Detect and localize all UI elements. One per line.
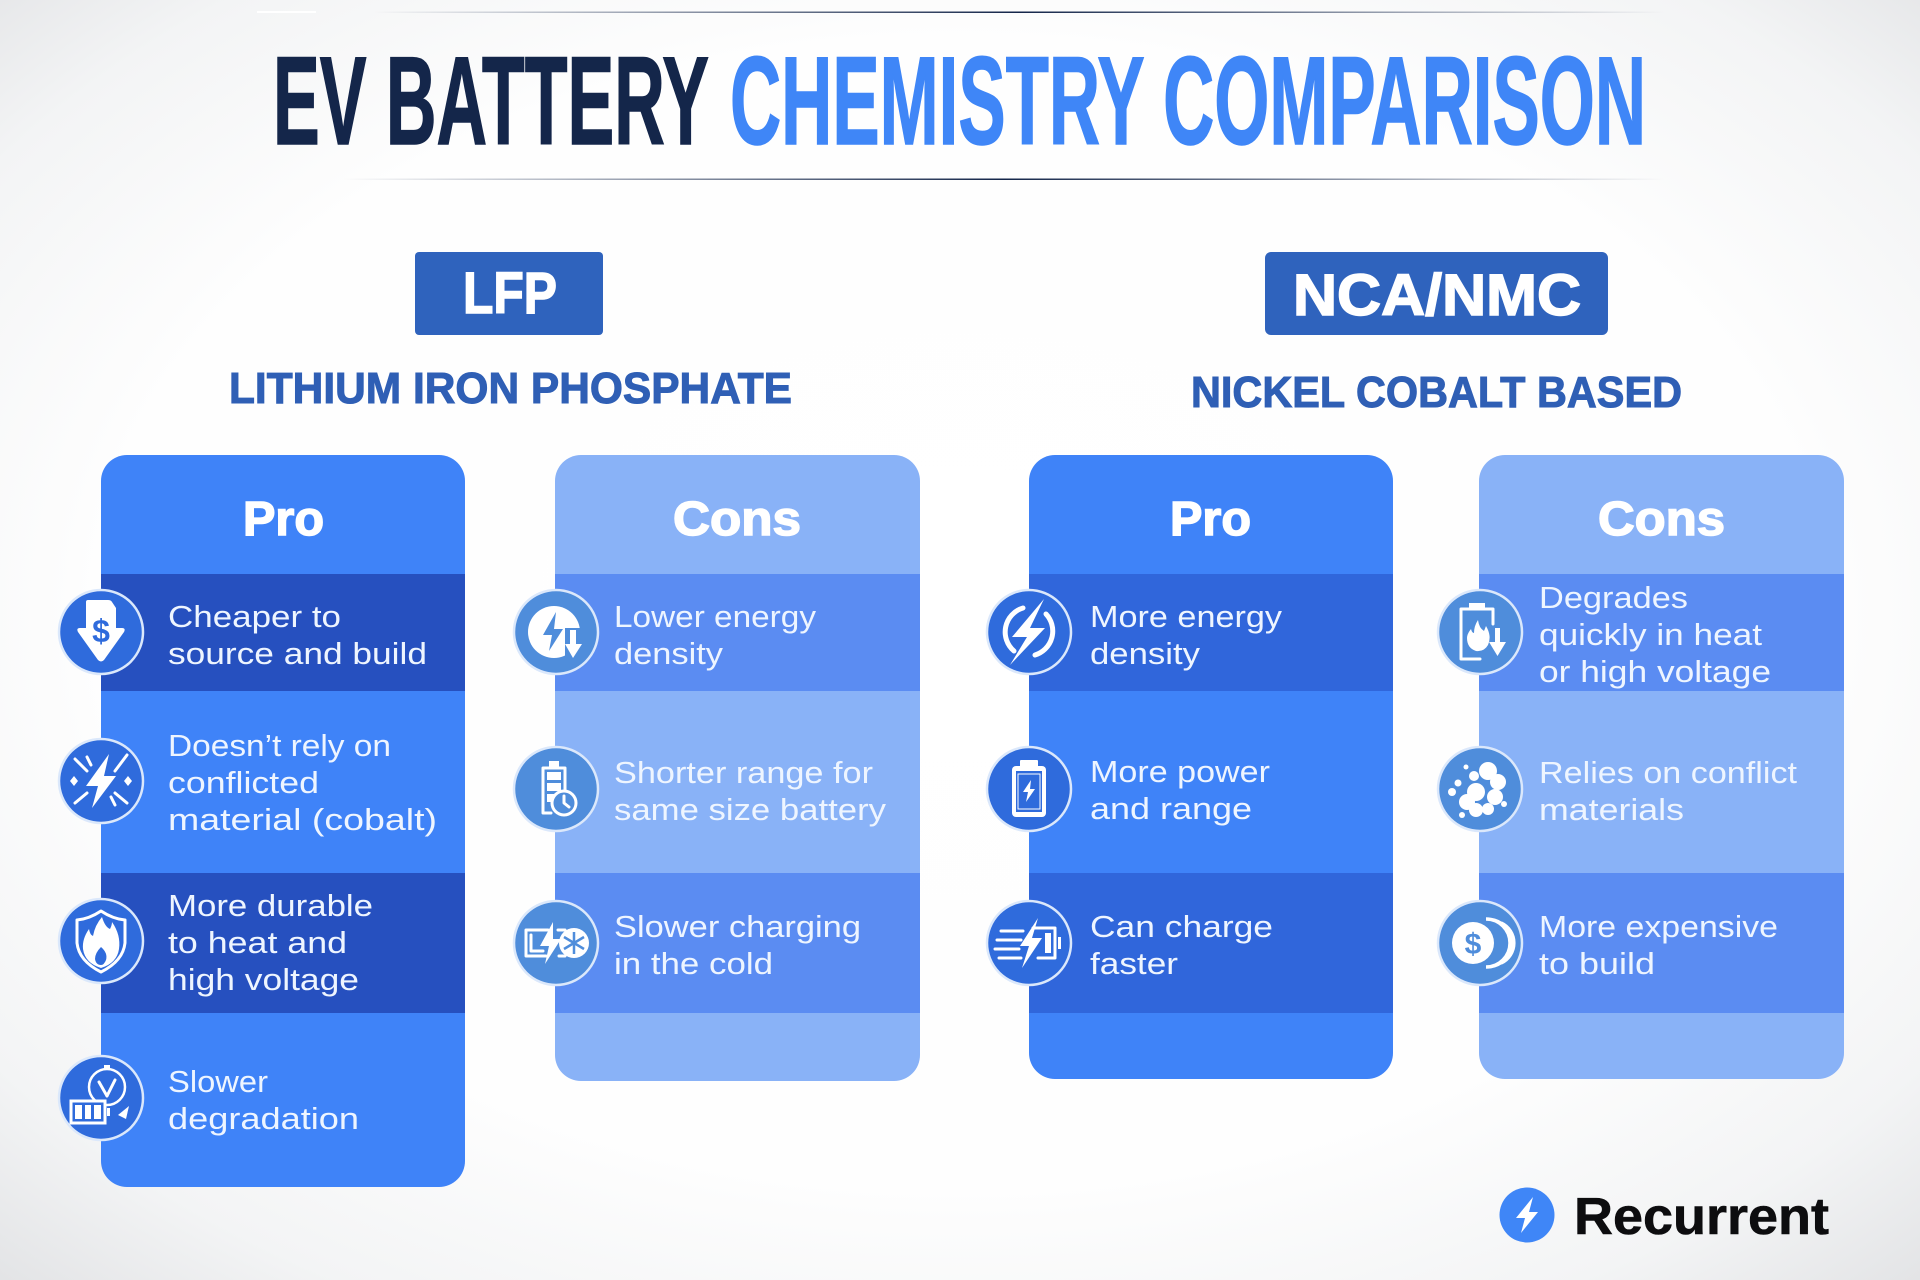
text: no cobalt: conflicted — [168, 765, 319, 800]
row: durable — [59, 888, 373, 997]
NCA/NMC badge: NCA/NMC — [1293, 263, 1581, 328]
text: shorter range: same size battery — [614, 792, 887, 827]
text: degrades — [1539, 580, 1771, 689]
text: slower degradation: Slower — [168, 1064, 268, 1099]
text: cheaper: source and build — [168, 636, 427, 671]
panel: NCA/NMC cons — [1438, 455, 1844, 1079]
icon: charged battery — [987, 747, 1071, 831]
text: more expensive: to build — [1539, 946, 1655, 981]
text: lower energy — [614, 599, 817, 671]
NCA pros heading: Pro — [1170, 493, 1251, 546]
icon: fast charging battery — [987, 901, 1071, 985]
text: degrades: or high voltage — [1539, 654, 1771, 689]
panel: LFP pros — [59, 455, 465, 1187]
text: charge faster: Can charge — [1090, 909, 1273, 944]
NCA/NMC badge — [1265, 252, 1608, 335]
NCA cons band 1 — [1479, 574, 1844, 691]
icon: coins: $ — [1465, 928, 1482, 961]
LFP pros band 2 — [101, 873, 465, 1013]
NCA cons band 2 — [1479, 873, 1844, 1013]
LFP badge: LFP — [463, 261, 557, 326]
text: more energy — [1090, 599, 1283, 671]
row: charge faster — [987, 901, 1273, 985]
NCA pros band 1 — [1029, 574, 1393, 691]
text: durable: high voltage — [168, 962, 359, 997]
text: conflict materials — [1539, 755, 1797, 827]
text: more expensive — [1539, 909, 1778, 981]
text: slower degradation — [168, 1064, 359, 1136]
text: more expensive: More expensive — [1539, 909, 1778, 944]
text: slower degradation: degradation — [168, 1101, 359, 1136]
icon: coins — [1438, 901, 1522, 985]
panel: NCA/NMC pros — [987, 455, 1393, 1079]
title: EV BATTERY — [273, 32, 709, 171]
text: more energy: More energy — [1090, 599, 1283, 634]
text: durable: More durable — [168, 888, 373, 923]
NCA cons card background — [1479, 455, 1844, 1079]
NCA/NMC subtitle: NICKEL COBALT BASED — [1191, 368, 1682, 417]
LFP cons card background — [555, 455, 920, 1081]
text: no cobalt: Doesn’t rely on — [168, 728, 391, 763]
icon: battery with flame — [1438, 590, 1522, 674]
NCA pros card background — [1029, 455, 1393, 1079]
icon: bolt with down arrow — [514, 590, 598, 674]
text: cold charging — [614, 909, 861, 981]
row: no cobalt — [59, 728, 437, 837]
row: more energy — [987, 590, 1283, 674]
LFP cons band 1 — [555, 574, 920, 691]
logo: Recurrent — [1500, 1188, 1829, 1246]
LFP cons band 2 — [555, 873, 920, 1013]
row: cheaper — [59, 590, 427, 674]
icon: battery bolt and snowflake — [514, 901, 598, 985]
row: degrades — [1438, 580, 1771, 689]
text: degrades: Degrades — [1539, 580, 1688, 615]
text: degrades: quickly in heat — [1539, 617, 1762, 652]
icon: battery and clock — [514, 747, 598, 831]
row: more expensive — [1438, 901, 1778, 985]
icon: shield with flame — [59, 899, 143, 983]
row: conflict materials — [1438, 747, 1797, 831]
panel: LFP cons — [514, 455, 920, 1081]
LFP pros heading: Pro — [243, 493, 324, 546]
text: durable — [168, 888, 373, 997]
text: no cobalt — [168, 728, 437, 837]
text: cheaper — [168, 599, 427, 671]
text: more energy: density — [1090, 636, 1201, 671]
LFP badge — [415, 252, 603, 335]
LFP cons heading: Cons — [673, 493, 801, 546]
row: slower degradation — [59, 1056, 359, 1140]
icon: molecule cluster — [1438, 747, 1522, 831]
text: durable: to heat and — [168, 925, 347, 960]
wordmark: Recurrent — [1574, 1188, 1829, 1246]
text: more power — [1090, 754, 1270, 826]
icon: bolt with sparks — [59, 739, 143, 823]
text: shorter range: Shorter range for — [614, 755, 873, 790]
text: lower energy: density — [614, 636, 724, 671]
icon: power bolt — [987, 590, 1071, 674]
LFP pros card background — [101, 455, 465, 1187]
text: cold charging: in the cold — [614, 946, 773, 981]
NCA pros band 2 — [1029, 873, 1393, 1013]
NCA cons heading: Cons — [1598, 493, 1725, 546]
text: more power: More power — [1090, 754, 1270, 789]
icon: price down arrow — [59, 590, 143, 674]
row: shorter range — [514, 747, 887, 831]
text: no cobalt: material (cobalt) — [168, 802, 437, 837]
LFP subtitle: LITHIUM IRON PHOSPHATE — [229, 364, 792, 413]
LFP pros band 1 — [101, 574, 465, 691]
icon: logo bolt — [1500, 1188, 1554, 1242]
row: lower energy — [514, 590, 817, 674]
text: charge faster: faster — [1090, 946, 1178, 981]
icon: price down arrow: $ — [92, 613, 110, 649]
text: cold charging: Slower charging — [614, 909, 861, 944]
row: more power — [987, 747, 1270, 831]
text: conflict materials: materials — [1539, 792, 1684, 827]
title — [273, 32, 1646, 171]
icon: clock and battery — [59, 1056, 143, 1140]
text: charge faster — [1090, 909, 1273, 981]
text: shorter range — [614, 755, 887, 827]
text: conflict materials: Relies on conflict — [1539, 755, 1797, 790]
text: more power: and range — [1090, 791, 1252, 826]
row: cold charging — [514, 901, 861, 985]
text: lower energy: Lower energy — [614, 599, 817, 634]
text: cheaper: Cheaper to — [168, 599, 341, 634]
